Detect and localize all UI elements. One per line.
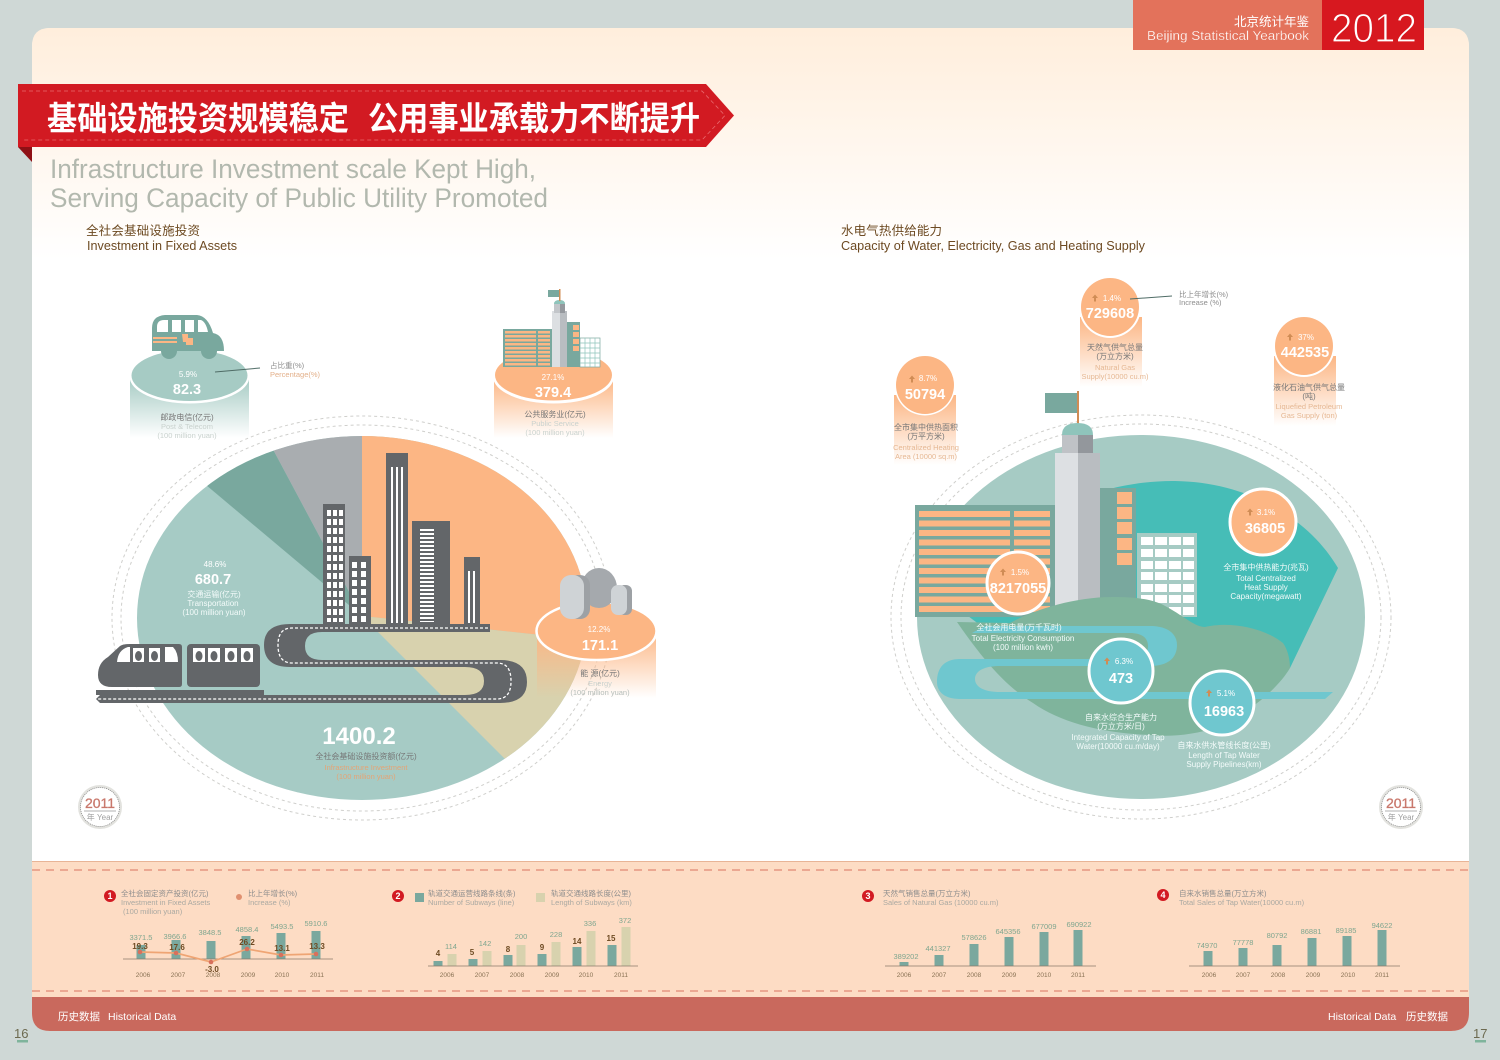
heading: investment (86, 223, 237, 253)
stat circle: tap water capacity (1071, 639, 1165, 751)
chart 1: fixed assets: -3.0 (205, 965, 219, 974)
stat circle: pipelines (1177, 671, 1271, 769)
icon: up arrow (909, 376, 915, 382)
stat circle: natural gas: Supply(10000 cu.m) (1081, 372, 1149, 381)
icon: up arrow (1000, 568, 1006, 576)
chart 2: subways: 200 (515, 932, 527, 941)
icon: up arrow (1287, 334, 1293, 340)
stat circle: electricity: (100 million kwh) (993, 643, 1053, 652)
stat circle: pipelines: 自来水供水管线长度(公里) (1177, 740, 1271, 750)
stat circle: heating area: 50794 (905, 387, 945, 403)
chart 1: fixed assets: 4858.4 (236, 925, 258, 934)
stat circle: heat supply capacity: 3.1% (1257, 508, 1275, 517)
percentage leader note: 占比重(%) (270, 360, 305, 370)
transportation label: Transportation (187, 599, 239, 608)
stat circle: LPG: Gas Supply (ton) (1281, 411, 1338, 420)
chart 3: natural gas sales: 690922 (1066, 920, 1092, 929)
page number right: 17 (1473, 1026, 1487, 1041)
badge: 2011 right (1379, 785, 1423, 829)
percentage leader note: Percentage(%) (270, 370, 321, 379)
stat circle: heating area: (万平方米) (907, 431, 945, 441)
stat circle: natural gas: 729608 (1086, 306, 1134, 322)
stat circle: natural gas: Natural Gas (1095, 363, 1135, 372)
stat circle: heating area (893, 354, 959, 465)
icon: up arrow (1104, 658, 1110, 664)
chart 2: subways: 114 (445, 942, 457, 951)
badge: 2011 left: 2011 (85, 795, 115, 811)
chart 2: subways: 2009 (545, 972, 560, 979)
increase leader note (1130, 289, 1229, 307)
icon: bus (152, 315, 224, 359)
stat circle: heating area: Area (10000 sq.m) (895, 452, 958, 461)
stat circle: electricity: Total Electricity Consumption (972, 634, 1074, 643)
chart 1: fixed assets: 2006 (136, 972, 151, 979)
stat circle: heat supply capacity (1223, 489, 1309, 601)
city skyline (323, 453, 480, 624)
chart 2: subways: 8 (506, 945, 511, 954)
chart 1: fixed assets: 2011 (310, 972, 324, 979)
chart 2: subways: 轨道交通线路长度(公里) (551, 888, 631, 898)
stat circle: heat supply capacity: 全市集中供热能力(兆瓦) (1223, 562, 1309, 572)
total investment label (315, 723, 417, 781)
chart 4: tap water sales: 77778 (1233, 938, 1253, 947)
stat circle: electricity: 全社会用电量(万千瓦时) (976, 622, 1062, 632)
title banner: 基础设施投资规模稳定 (47, 100, 349, 137)
stat circle: electricity: 8217055 (990, 581, 1046, 597)
icon: rocks (560, 568, 632, 619)
chart 3: natural gas sales (862, 888, 1096, 979)
total investment label: (100 million yuan) (336, 772, 396, 781)
stat circle: heating area: Centralized Heating (893, 443, 959, 452)
percentage leader note (215, 360, 321, 379)
chart 3: natural gas sales: 645356 (995, 927, 1021, 936)
stat circle: natural gas: (万立方米) (1096, 351, 1134, 361)
icon: up arrow (1247, 508, 1253, 516)
yearbook header tab: 北京统计年鉴 (1234, 15, 1309, 29)
footer bar: Historical Data (108, 1011, 176, 1023)
chart 1: fixed assets: 13.3 (309, 942, 325, 951)
chart 3: natural gas sales: 2009 (1002, 972, 1017, 979)
chart 2: subways: 2008 (510, 972, 525, 979)
badge: 2011 right: 2011 (1386, 795, 1416, 811)
total investment label: 全社会基础设施投资额(亿元) (315, 751, 417, 761)
stat circle: LPG: Liquefied Petroleum (1276, 402, 1342, 411)
chart 2: subways: 228 (550, 930, 562, 939)
chart 4: tap water sales: 2006 (1202, 972, 1217, 979)
stat circle: tap water capacity: Integrated Capacity of Tap (1071, 733, 1165, 742)
chart 2: subways: 5 (470, 948, 475, 957)
badge: 2011 right: 年 Year (1388, 812, 1415, 822)
stat circle: heat supply capacity: Heat Supply (1244, 583, 1288, 592)
increase leader note: 比上年增长(%) (1179, 289, 1229, 299)
badge: 2011 left (78, 785, 122, 829)
chart 2: subways: 9 (540, 943, 545, 952)
chart 4: tap water sales: 2011 (1375, 972, 1389, 979)
increase leader note: Increase (%) (1179, 298, 1222, 307)
chart 4: tap water sales: 86881 (1301, 927, 1321, 936)
cylinder: public service (493, 289, 614, 438)
stat circle: pipelines: Supply Pipelines(km) (1186, 760, 1262, 769)
transportation label: 交通运输(亿元) (187, 589, 241, 599)
stat circle: electricity (972, 552, 1074, 652)
total investment label: 1400.2 (322, 723, 396, 750)
chart 1: fixed assets: 2008 (206, 972, 221, 979)
chart 4: tap water sales: 2009 (1306, 972, 1321, 979)
chart 4: tap water sales: 94622 (1372, 921, 1392, 930)
footer bar: 历史数据 (58, 1010, 100, 1023)
chart 1: fixed assets: 全社会固定资产投资(亿元) (121, 888, 209, 898)
chart 4: tap water sales: 2007 (1236, 972, 1251, 979)
chart 2: subways: 轨道交通运营线路条线(条) (428, 888, 516, 898)
chart 2: subways: 2011 (614, 972, 628, 979)
chart 3: natural gas sales: Sales of Natural Gas (10000 cu.m) (883, 898, 999, 907)
chart 3: natural gas sales: 389202 (893, 952, 919, 961)
yearbook header tab (1133, 0, 1424, 51)
chart 1: fixed assets: 3848.5 (199, 928, 221, 937)
cylinder: public service: 379.4 (535, 385, 571, 401)
heading: investment: Investment in Fixed Assets (87, 238, 237, 253)
green hill (957, 597, 1290, 736)
transportation label: (100 million yuan) (182, 608, 246, 617)
chart 3: natural gas sales: 578626 (961, 933, 987, 942)
city dome: water, power, gas, heat (891, 415, 1391, 819)
chart 1: fixed assets: 3966.6 (164, 932, 186, 941)
english subtitle (50, 154, 548, 213)
chart 1: fixed assets: (100 million yuan) (123, 907, 183, 916)
chart 4: tap water sales: 74970 (1197, 941, 1217, 950)
chart 1: fixed assets: 2007 (171, 972, 186, 979)
chart 4: tap water sales: Total Sales of Tap Water(10000 cu.m) (1179, 898, 1305, 907)
icon: small city buildings (503, 289, 600, 367)
stat circle: LPG: 442535 (1281, 345, 1329, 361)
stat circle: tap water capacity: Water(10000 cu.m/day) (1076, 742, 1160, 751)
chart 3: natural gas sales: 2007 (932, 972, 947, 979)
cylinder: energy: (100 million yuan) (570, 688, 630, 697)
english subtitle: Serving Capacity of Public Utility Promoted (50, 183, 548, 213)
stat circle: LPG: (吨) (1302, 391, 1316, 401)
chart 1: fixed assets: 1 (107, 891, 113, 901)
chart 1: fixed assets: 17.6 (169, 943, 185, 952)
chart 1: fixed assets (104, 888, 333, 979)
chart 2: subways: 4 (436, 949, 441, 958)
transportation label: 680.7 (195, 572, 231, 588)
water ribbon (937, 626, 1333, 699)
cylinder: post and telecom: 82.3 (173, 382, 201, 398)
cylinder: public service: 27.1% (542, 373, 564, 382)
transportation label: 48.6% (204, 560, 226, 569)
stat circle: pipelines: Length of Tap Water (1188, 751, 1260, 760)
footer bar: Historical Data (1328, 1011, 1396, 1023)
stat circle: tap water capacity: 473 (1109, 671, 1133, 687)
stat circle: LPG: 37% (1298, 333, 1314, 342)
chart 3: natural gas sales: 2006 (897, 972, 912, 979)
chart 1: fixed assets: 2009 (241, 972, 256, 979)
icon: up arrow (1206, 690, 1212, 696)
historical data band (32, 861, 1469, 997)
title banner: 公用事业承载力不断提升 (368, 100, 700, 137)
chart 2: subways: Number of Subways (line) (428, 898, 515, 907)
stat circle: natural gas (1079, 276, 1149, 387)
chart 2: subways: 2010 (579, 972, 594, 979)
chart 2: subways: 372 (619, 916, 631, 925)
chart 3: natural gas sales: 441327 (925, 944, 951, 953)
chart 4: tap water sales: 2008 (1271, 972, 1286, 979)
stat circle: natural gas: 天然气供气总量 (1087, 342, 1143, 352)
grid building (1137, 533, 1197, 617)
heading: capacity: 水电气热供给能力 (841, 223, 942, 238)
stat circle: heat supply capacity: Capacity(megawatt) (1230, 592, 1302, 601)
chart 3: natural gas sales: 677009 (1031, 922, 1057, 931)
cylinder: energy: 12.2% (588, 625, 610, 634)
chart 3: natural gas sales: 3 (865, 891, 871, 901)
chart 4: tap water sales: 80792 (1267, 931, 1287, 940)
chart 4: tap water sales: 89185 (1336, 926, 1356, 935)
chart 1: fixed assets: 5910.6 (305, 919, 327, 928)
winding road (96, 624, 527, 703)
stat circle: heating area: 全市集中供热面积 (894, 422, 958, 432)
badge: 2011 left: 年 Year (87, 812, 114, 822)
transportation label (182, 560, 246, 617)
yearbook header tab: 2012 (1331, 5, 1417, 51)
chart 4: tap water sales: 自来水销售总量(万立方米) (1179, 888, 1267, 898)
chart 3: natural gas sales: 2008 (967, 972, 982, 979)
train (96, 644, 264, 695)
chart 3: natural gas sales: 天然气销售总量(万立方米) (883, 888, 971, 898)
chart 2: subways: 2006 (440, 972, 455, 979)
cylinder: post and telecom (130, 315, 250, 440)
page number left: 16 (14, 1026, 28, 1041)
chart 1: fixed assets: 19.3 (132, 942, 148, 951)
chart 1: fixed assets: 2010 (275, 972, 290, 979)
stat circle: heat supply capacity: Total Centralized (1236, 574, 1296, 583)
total investment label: Infrastructure Investment (325, 763, 408, 772)
stat circle: pipelines: 16963 (1204, 704, 1244, 720)
chart 4: tap water sales: 4 (1160, 890, 1166, 900)
stat circle: pipelines: 5.1% (1217, 689, 1235, 698)
stat circle: electricity: 1.5% (1011, 568, 1029, 577)
stat circle: tap water capacity: 自来水综合生产能力 (1085, 712, 1157, 722)
chart 2: subways: 15 (607, 934, 616, 943)
chart 2: subways: Length of Subways (km) (551, 898, 632, 907)
chart 1: fixed assets: Increase (%) (248, 898, 291, 907)
heading: capacity (841, 223, 1145, 253)
heading: investment: 全社会基础设施投资 (86, 223, 200, 238)
cylinder: post and telecom: (100 million yuan) (157, 431, 217, 440)
cylinder: energy: 171.1 (582, 638, 618, 654)
chart 2: subways: 2 (395, 891, 401, 901)
chart 4: tap water sales (1157, 888, 1400, 979)
large orange building (915, 505, 1055, 617)
chart 1: fixed assets: Investment in Fixed Assets (121, 898, 210, 907)
cylinder: public service: 公共服务业(亿元) (524, 409, 586, 419)
chart 2: subways: 142 (479, 939, 491, 948)
teal side building (1100, 488, 1136, 603)
chart 2: subways: 14 (573, 937, 582, 946)
cylinder: public service: Public Service (531, 419, 579, 428)
stat circle: LPG: 液化石油气供气总量 (1273, 382, 1345, 392)
stat circle: tap water capacity: 6.3% (1115, 657, 1133, 666)
chart 1: fixed assets: 26.2 (239, 938, 255, 947)
cylinder: energy: 能 源(亿元) (580, 668, 620, 678)
footer bar: 历史数据 (1406, 1010, 1448, 1023)
chart 1: fixed assets: 3371.5 (130, 933, 152, 942)
tower with flag (1045, 391, 1100, 608)
stat circle: heating area: 8.7% (919, 374, 937, 383)
stat circle: tap water capacity: (万立方米/日) (1097, 721, 1145, 731)
chart 4: tap water sales: 2010 (1341, 972, 1356, 979)
chart 2: subways: 336 (584, 919, 596, 928)
cylinder: energy (536, 568, 656, 698)
chart 1: fixed assets: 5493.5 (271, 922, 293, 931)
cylinder: post and telecom: 邮政电信(亿元) (160, 412, 214, 422)
pie chart: infrastructure investment (112, 416, 607, 820)
chart 1: fixed assets: 比上年增长(%) (248, 888, 298, 898)
cylinder: post and telecom: Post & Telecom (161, 422, 213, 431)
stat circle: heat supply capacity: 36805 (1245, 521, 1285, 537)
footer bar (32, 997, 1469, 1031)
english subtitle: Infrastructure Investment scale Kept High, (50, 154, 536, 184)
stat circle: LPG (1273, 315, 1345, 426)
heading: capacity: Capacity of Water, Electricity, Gas and Heating Supply (841, 238, 1145, 253)
yearbook header tab: Beijing Statistical Yearbook (1147, 28, 1310, 43)
chart 3: natural gas sales: 2011 (1071, 972, 1085, 979)
cylinder: energy: Energy (588, 679, 612, 688)
title banner (18, 84, 734, 162)
chart 2: subways (392, 888, 638, 979)
icon: up arrow (1092, 294, 1098, 302)
chart 2: subways: 2007 (475, 972, 490, 979)
chart 3: natural gas sales: 2010 (1037, 972, 1052, 979)
cylinder: post and telecom: 5.9% (179, 370, 197, 379)
cylinder: public service: (100 million yuan) (525, 428, 585, 437)
stat circle: natural gas: 1.4% (1103, 294, 1121, 303)
chart 1: fixed assets: 13.1 (274, 944, 290, 953)
